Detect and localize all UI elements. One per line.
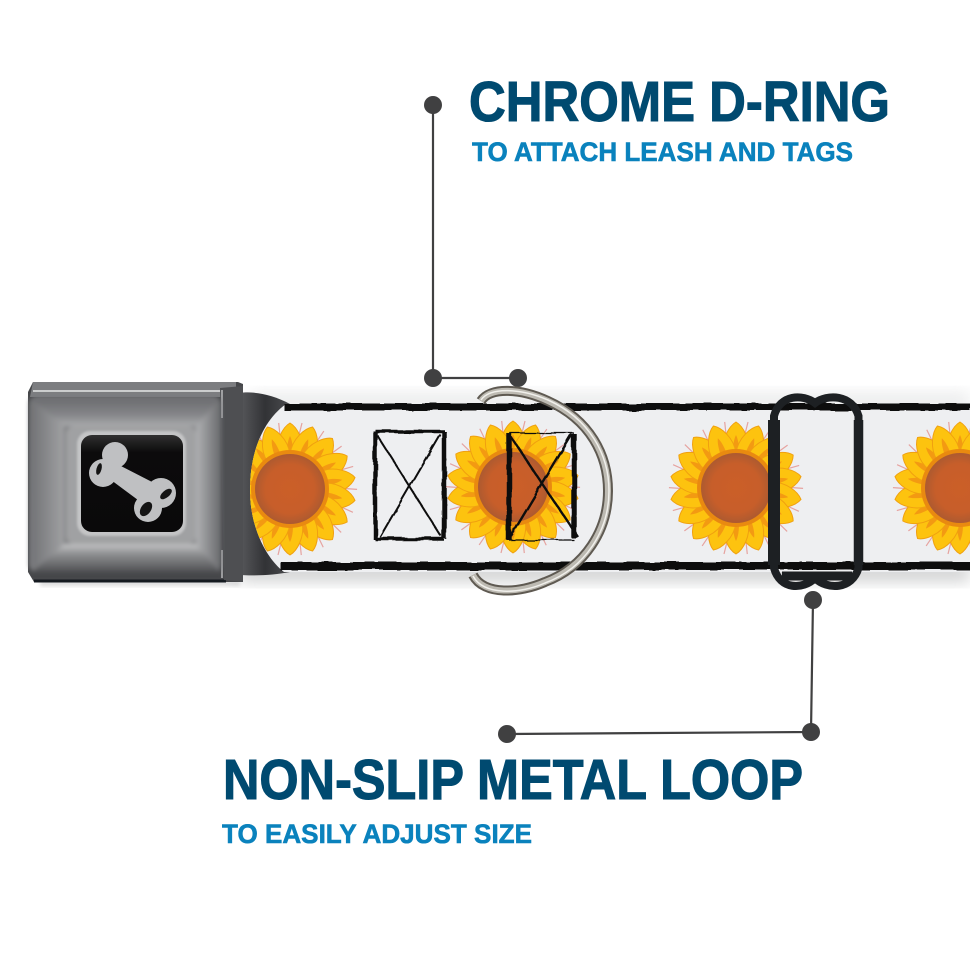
buckle [28,382,243,582]
black emblem square [81,435,183,532]
buckle highlights [62,550,198,552]
callout connector: chrome d-ring [424,96,527,387]
collar strap [223,404,970,572]
buckle base [28,382,243,582]
buckle raised face [29,396,221,572]
sunflower 4 [893,422,970,554]
missing image box 1 [375,431,444,539]
non-slip metal loop [774,397,858,586]
strap top and bottom borders [280,407,970,566]
missing image box 2 [509,433,578,540]
sunflower 1 [250,422,358,556]
sunflower 2 [446,421,580,553]
chrome d-ring [473,391,609,591]
subheading: to attach leash and tags: TO ATTACH LEASH AND TAGS [472,137,853,167]
sunflower 3 [669,422,803,554]
subheading: to easily adjust size: TO EASILY ADJUST SIZE [222,819,532,849]
heading: chrome d-ring: CHROME D-RING [469,70,890,134]
buckle tab behind strap [240,392,290,575]
callout connector: non-slip metal loop [498,591,822,743]
bone icon [89,442,176,522]
strap shadow [40,394,970,586]
heading: non-slip metal loop: NON-SLIP METAL LOOP [223,748,803,812]
